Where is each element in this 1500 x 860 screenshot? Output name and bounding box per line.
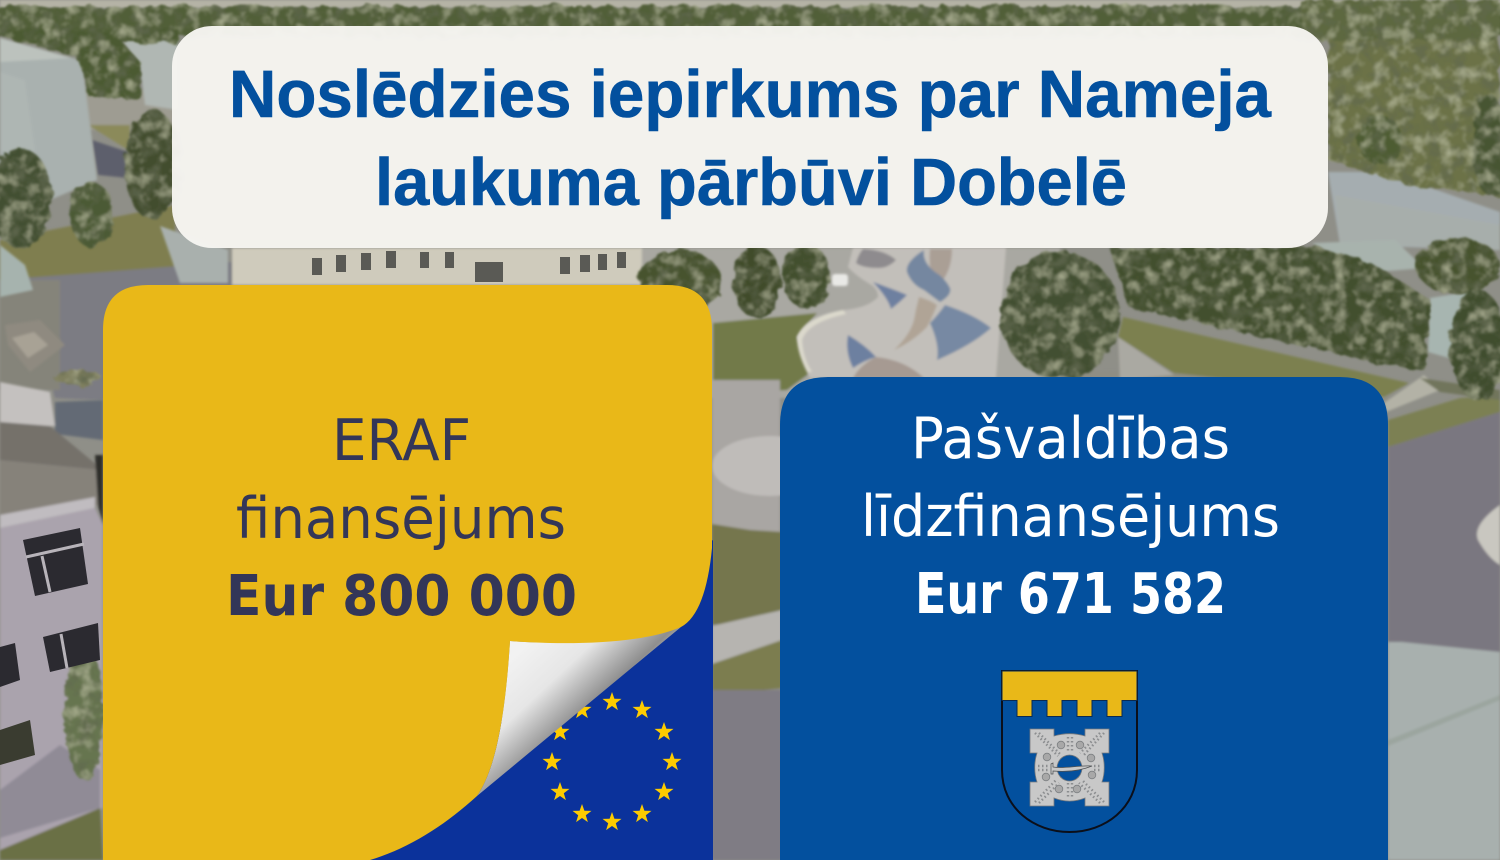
background: building windows [0,251,626,765]
brooch pin [1051,763,1092,774]
ERAF amount: Eur 800 000 [226,564,577,629]
title line 1: Noslēdzies iepirkums par Nameja [229,57,1272,132]
background: curved plaza mosaic [797,248,1006,378]
icon: ring of twelve EU stars [542,692,682,830]
title line 2: laukuma pārbūvi Dobelē [375,145,1127,220]
icon: Dobele coat of arms [1002,671,1137,832]
EU flag under page curl [365,540,713,860]
ERAF label: ERAF [332,408,471,474]
panel: municipal co-financing [780,377,1388,860]
co-financing label: līdzfinansējums [861,484,1280,550]
background: window frames [26,544,84,668]
municipality label: Pašvaldības [911,406,1230,472]
municipal amount: Eur 671 582 [915,562,1226,627]
background: parked cars and terrace [5,274,848,372]
yellow card [103,285,712,860]
brooch rivets [1042,741,1096,793]
brooch emblem [1030,729,1109,806]
panel: ERAF funding [103,285,713,860]
title panel [172,26,1328,248]
silver page curl [477,627,681,796]
brooch dotted cross [1035,733,1104,803]
financing label: finansējums [236,486,566,552]
